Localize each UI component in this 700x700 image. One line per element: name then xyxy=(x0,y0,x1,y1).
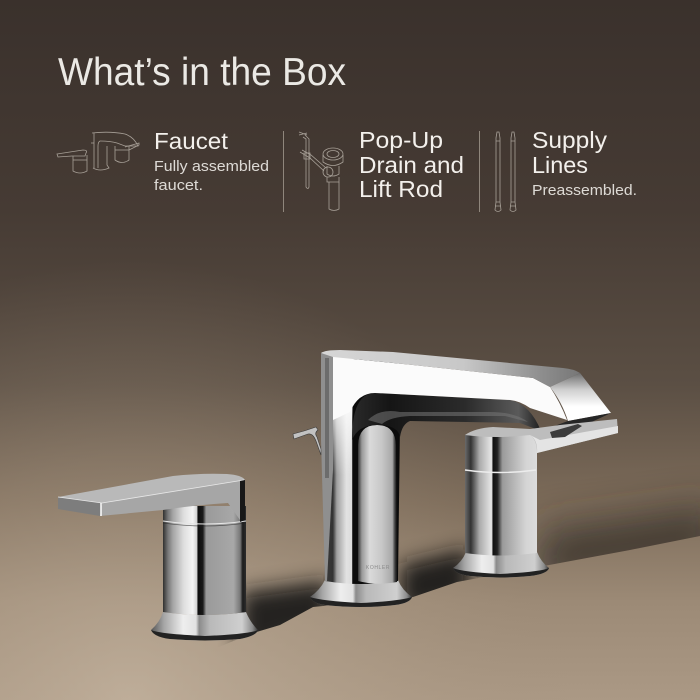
column highlight fade xyxy=(333,357,353,475)
handle body xyxy=(163,506,246,615)
heading: pop-up drain and lift rod: Lift Rod xyxy=(359,176,443,202)
item: faucet xyxy=(57,128,269,194)
icon: supply lines line drawing xyxy=(495,132,516,212)
column base xyxy=(310,580,412,607)
spout and main column xyxy=(293,350,611,607)
item: supply lines xyxy=(495,127,637,212)
handle base xyxy=(453,552,549,578)
handle lever xyxy=(58,474,245,522)
spout tip xyxy=(550,373,611,421)
heading: supply lines: Supply xyxy=(532,127,608,153)
description: fully assembled faucet: Fully assembled xyxy=(154,158,269,175)
heading: pop-up drain and lift rod: Pop-Up xyxy=(359,127,443,153)
heading: Faucet: Faucet xyxy=(154,128,229,154)
makers mark: KOHLER xyxy=(366,565,390,571)
description: fully assembled faucet: faucet. xyxy=(154,177,203,194)
handle body xyxy=(465,435,537,556)
spout underside xyxy=(352,393,541,440)
handle base xyxy=(151,612,258,640)
heading: pop-up drain and lift rod: Drain and xyxy=(359,152,464,178)
icon: faucet line drawing xyxy=(57,132,139,173)
left handle xyxy=(58,474,258,640)
heading: supply lines: Lines xyxy=(532,152,588,178)
spout top surface xyxy=(321,350,580,387)
icon: drain and lift rod line drawing xyxy=(299,132,343,210)
spout outlet shadow xyxy=(541,413,611,439)
cast shadow band xyxy=(240,505,700,660)
spout front face xyxy=(333,357,567,420)
pop-up lift rod knob xyxy=(293,427,321,455)
right handle xyxy=(453,419,618,578)
spout edge xyxy=(321,351,333,581)
column shaft xyxy=(358,425,397,584)
column xyxy=(321,353,400,584)
item: pop-up drain and lift rod xyxy=(299,127,464,210)
handle lever xyxy=(465,419,618,453)
title: What’s in the Box xyxy=(58,51,346,94)
description: preassembled: Preassembled. xyxy=(532,182,637,199)
